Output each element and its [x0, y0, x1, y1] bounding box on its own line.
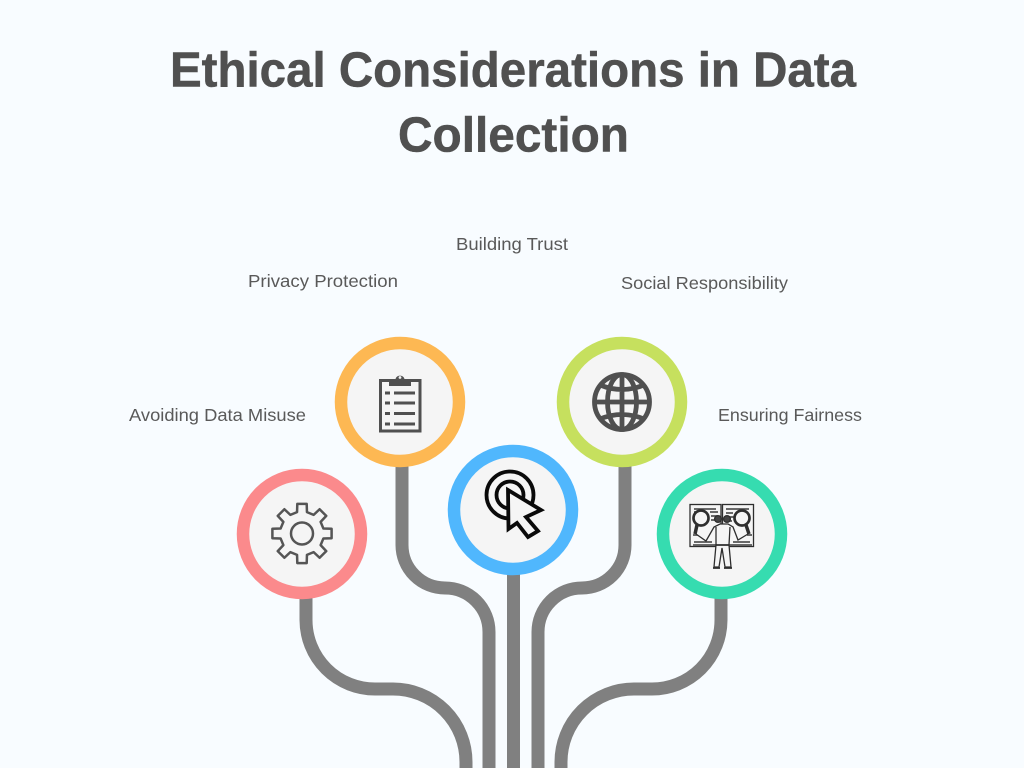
node: red circle with gear	[243, 475, 361, 593]
icon: cursor on target	[486, 472, 541, 537]
title: Ethical Considerations in Data	[170, 44, 857, 98]
node: blue circle with cursor	[454, 451, 572, 569]
icon: person inspecting boards	[690, 504, 754, 568]
icon: gear	[272, 504, 332, 563]
title: Collection	[398, 108, 629, 162]
label: Privacy Protection: Privacy Protection	[248, 271, 398, 291]
icon: globe	[594, 374, 650, 430]
connector stems	[306, 464, 721, 768]
label: Avoiding Data Misuse: Avoiding Data Misuse	[129, 405, 306, 425]
node: teal circle with analyst	[663, 475, 781, 593]
label: Building Trust: Building Trust	[456, 234, 568, 254]
title	[170, 44, 857, 162]
label: Ensuring Fairness: Ensuring Fairness	[718, 405, 862, 425]
label: Social Responsibility: Social Responsibility	[621, 273, 788, 293]
icon: clipboard	[380, 376, 420, 431]
node: orange circle with clipboard	[341, 343, 459, 461]
node: green circle with globe	[563, 343, 681, 461]
